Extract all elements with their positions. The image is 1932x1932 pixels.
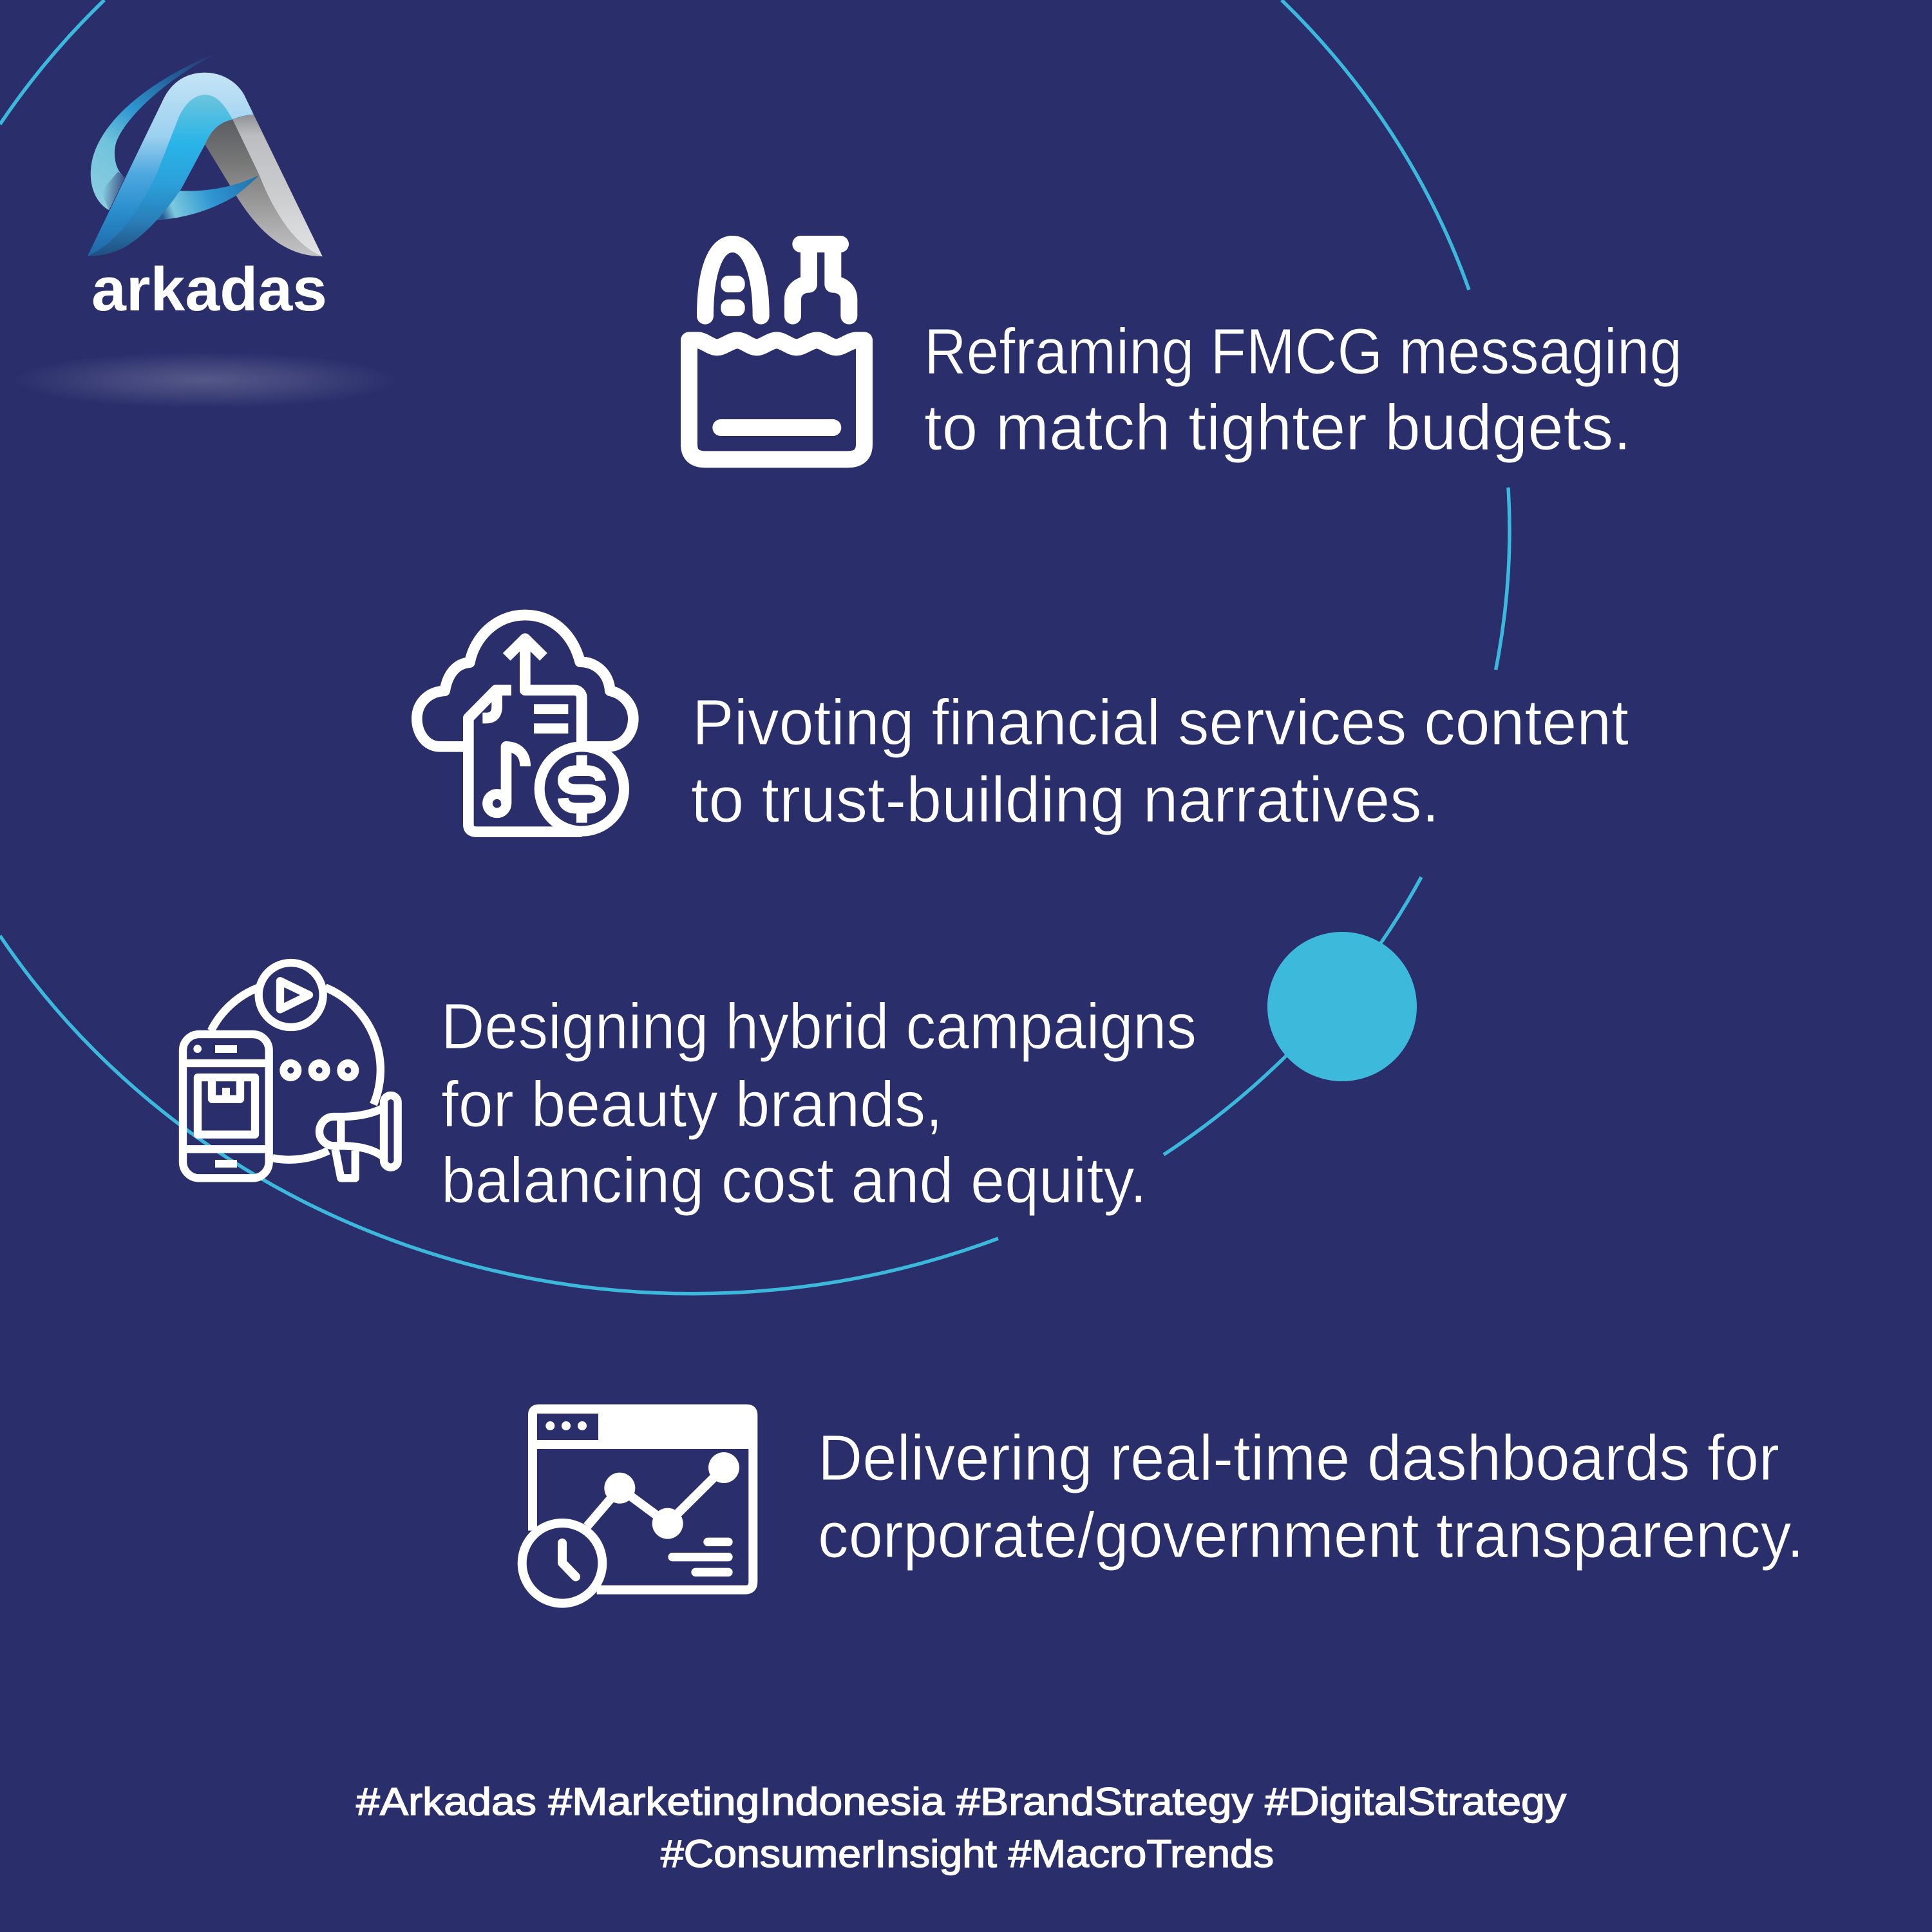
- logo: Arkadas: [88, 52, 327, 324]
- icon: phone, video bubble and megaphone: [183, 963, 398, 1178]
- accent circle: [1267, 932, 1417, 1081]
- text: beauty brands: balancing cost and equity.: [441, 1144, 1147, 1217]
- text: dashboards: corporate/government transparency.: [818, 1499, 1804, 1571]
- item 2: financial services: [417, 615, 1629, 836]
- decorative orbit arcs: [0, 0, 1510, 1294]
- text: financial services: to trust-building narratives.: [691, 764, 1439, 836]
- icon: cloud with document and coin: [417, 615, 633, 832]
- text: FMCG messaging: to match tighter budgets.: [924, 392, 1631, 464]
- text: dashboards: [818, 1422, 1804, 1571]
- text: beauty brands: [441, 990, 1197, 1217]
- text: financial services: [691, 687, 1629, 836]
- text: FMCG messaging: [924, 316, 1682, 464]
- text: beauty brands: for beauty brands,: [441, 1068, 943, 1141]
- hashtags: #ConsumerInsight #MacroTrends: [661, 1832, 1274, 1875]
- text: FMCG messaging: Reframing FMCG messaging: [924, 316, 1682, 388]
- logo glow: [12, 352, 398, 408]
- icon: dashboard window with clock: [522, 1409, 753, 1604]
- text: financial services: Pivoting financial services content: [692, 687, 1629, 759]
- item 4: dashboards: [522, 1409, 1804, 1604]
- text: dashboards: Delivering real-time dashboards for: [818, 1422, 1779, 1494]
- logo wordmark: arkadas: [91, 255, 327, 324]
- item 3: beauty brands: [183, 963, 1197, 1217]
- hashtags: #Arkadas #MarketingIndonesia #BrandStrategy #DigitalStrategy: [356, 1780, 1566, 1823]
- text: beauty brands: Designing hybrid campaigns: [441, 990, 1197, 1063]
- logo mark: [88, 52, 323, 256]
- item 1: FMCG messaging: [689, 244, 1682, 464]
- icon: grocery bag: [689, 244, 864, 459]
- hashtags: [356, 1780, 1566, 1875]
